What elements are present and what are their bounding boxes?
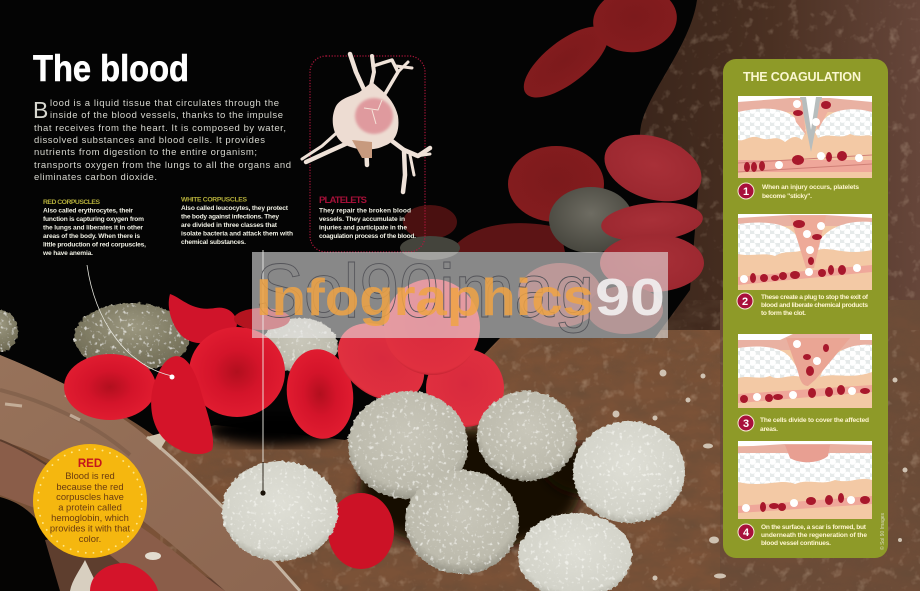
callout: RED circle: RED: [78, 458, 102, 470]
credit: © Sol 90 Images: [879, 512, 886, 550]
step 3 text: The cells divide to cover the affected: [760, 417, 869, 424]
callout: RED circle: provides it with that: [50, 522, 131, 534]
callout: RED circle: because the red: [56, 481, 124, 492]
red blood cells, foreground: [64, 279, 504, 591]
illustration: step 1 injury: [738, 90, 872, 178]
intro text block: [33, 97, 291, 183]
step 2 badge: [737, 293, 753, 309]
step 4 text: On the surface, a scar is formed, but: [761, 524, 867, 531]
text block: platelets: injuries and participate in the: [319, 224, 407, 232]
text block: platelets: vessels. They accumulate in: [319, 216, 405, 223]
text block: white corpuscles: isolate bacteria and attack them with: [181, 230, 293, 238]
watermark band: Sol90imag: [256, 249, 594, 334]
step 4 badge: [738, 524, 754, 540]
step 1 text: [762, 184, 859, 200]
watermark band: Infographics: [256, 269, 594, 327]
panel: the coagulation: [723, 59, 888, 558]
text block: red corpuscles: RED CORPUSCLES: [43, 199, 100, 206]
text block: platelets: [319, 195, 416, 240]
step 1 badge: 1: [743, 186, 749, 198]
text block: red corpuscles: [42, 199, 146, 257]
intro text block: transports oxygen from the lungs to all the organs and: [34, 160, 291, 171]
platelet callout frame: [310, 56, 425, 252]
text block: white corpuscles: WHITE CORPUSCLES: [181, 196, 247, 204]
text block: red corpuscles: we have anemia.: [42, 250, 93, 257]
step 4 text: blood vessel continues.: [761, 540, 831, 547]
intro text block: lood is a liquid tissue that circulates through the: [50, 98, 279, 109]
text block: red corpuscles: areas of the body. When there is: [43, 233, 140, 240]
leader line: red corpuscles: [87, 265, 174, 380]
step 1 text: When an injury occurs, platelets: [762, 184, 859, 191]
callout: RED circle: [33, 444, 147, 558]
illustration: step 2 plug: [738, 214, 872, 290]
title: The blood: [33, 48, 189, 89]
leader line: white corpuscles: [260, 250, 266, 496]
text block: red corpuscles: Also called erythrocytes, their: [43, 208, 133, 214]
intro text block: eliminates carbon dioxide.: [34, 172, 157, 183]
intro text block: inside of the blood vessels, thanks to the impulse: [50, 110, 283, 121]
text block: platelets: They repair the broken blood: [319, 208, 411, 214]
text block: red corpuscles: the lungs and liberates it in other: [43, 224, 143, 232]
upper dark red cells: [400, 0, 710, 334]
white blood cells: [222, 391, 685, 591]
step 3 text: [760, 417, 869, 433]
illustration: step 4 scar: [738, 441, 872, 519]
text block: red corpuscles: little production of red corpuscles,: [43, 242, 146, 248]
text block: platelets: coagulation process of the blood.: [319, 233, 416, 240]
tissue specks: [612, 370, 908, 580]
text block: white corpuscles: the body against infections. They: [181, 214, 279, 220]
illustration: step 3 cell division: [738, 333, 872, 408]
callout: RED circle: Blood is red: [65, 470, 115, 481]
step 2 text: These create a plug to stop the exit of: [761, 294, 869, 301]
step 3 text: areas.: [760, 426, 778, 433]
text block: white corpuscles: [181, 196, 293, 246]
step 2 badge: 2: [742, 296, 748, 308]
text block: white corpuscles: chemical substances.: [181, 239, 246, 246]
step 3 badge: [738, 415, 754, 431]
callout: RED circle: hemoglobin, which: [51, 512, 129, 523]
intro text block: dissolved substances and blood cells. It provides: [34, 135, 265, 146]
step 4 badge: 4: [743, 527, 750, 539]
step 2 text: to form the clot.: [761, 310, 806, 317]
callout: RED circle: color.: [79, 533, 101, 544]
callout: RED circle: a protein called: [58, 502, 122, 512]
step 1 text: become "sticky".: [762, 193, 812, 200]
panel heading: THE COAGULATION: [743, 70, 861, 84]
step 1 badge: [738, 183, 754, 199]
step 4 text: underneath the regeneration of the: [761, 532, 867, 539]
icon: platelet cell: [302, 54, 430, 192]
text block: platelets: PLATELETS: [319, 195, 367, 206]
step 4 text: [761, 524, 867, 547]
tissue fibre, lower left: [0, 355, 300, 591]
step 2 text: [761, 294, 869, 317]
intro text block: that receives from the heart. It is composed by water,: [34, 123, 286, 134]
dark shadow under cells: [205, 414, 635, 550]
step 3 badge: 3: [743, 418, 749, 430]
intro text block: B: [33, 97, 48, 123]
text block: red corpuscles: function is capturing oxygen from: [43, 216, 144, 223]
text block: white corpuscles: are divided in three classes that: [181, 222, 278, 229]
step 2 text: blood and liberate chemical products: [761, 302, 868, 309]
watermark band: 90: [595, 269, 665, 327]
khaki white-cell group behind red cells: [0, 303, 338, 372]
text block: white corpuscles: Also called leucocytes, they protect: [181, 205, 289, 212]
callout: RED circle: corpuscles have: [56, 491, 124, 502]
intro text block: nutrients from digestion to the entire organism;: [34, 147, 257, 158]
